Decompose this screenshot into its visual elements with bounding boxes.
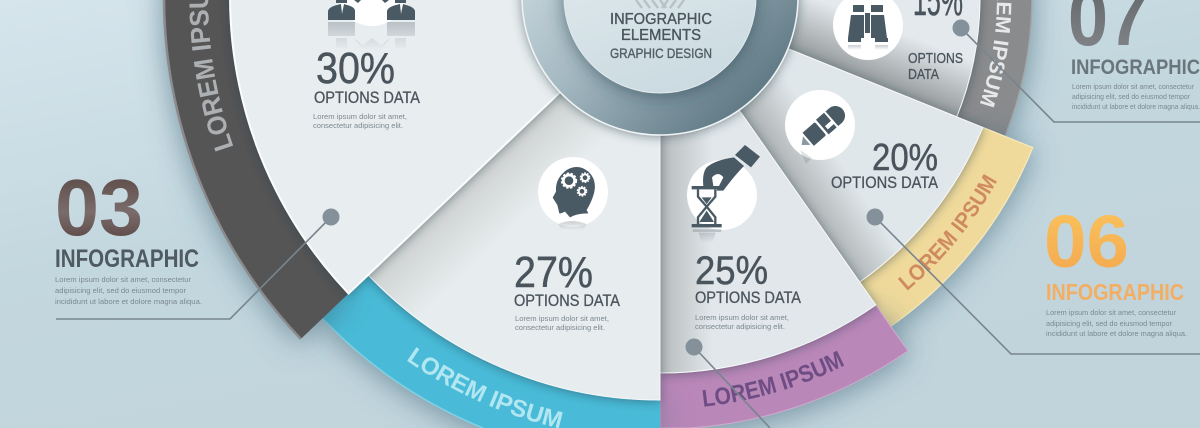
leader line (56, 208, 340, 319)
hatch icon (636, 0, 684, 8)
description text: incididunt ut labore et dolore magna aliqua. (55, 297, 202, 306)
description text: Lorem ipsum dolor sit amet, (515, 314, 609, 323)
description text: Lorem ipsum dolor sit amet, (313, 112, 407, 121)
segment: 25% options data (660, 108, 917, 428)
description text: consectetur adipisicing elit. (313, 121, 403, 130)
segment: 20% options data (740, 44, 1044, 340)
outer ring (522, 0, 798, 135)
options data label: OPTIONS (908, 51, 963, 67)
purple band: LOREM IPSUM (702, 350, 844, 407)
description text (515, 314, 609, 332)
description text: consectetur adipisicing elit. (515, 323, 605, 332)
inner disc (564, 0, 756, 93)
callout 05 leader (686, 338, 770, 428)
description text: adipisicing elit, sed do eiusmod tempor (55, 286, 186, 295)
icon: binoculars (833, 0, 903, 60)
central hub (522, 0, 798, 135)
callout 07 (952, 0, 1200, 122)
leader line (866, 208, 1200, 354)
description text: Lorem ipsum dolor sit amet, (695, 313, 789, 322)
icon: hand and hourglass (687, 145, 760, 243)
options data label: DATA (908, 67, 939, 83)
description text (313, 112, 407, 130)
description text (1072, 82, 1200, 111)
segment: 27% options data (316, 94, 677, 428)
hub title: GRAPHIC DESIGN (610, 45, 712, 61)
number 06: 06 (1044, 200, 1129, 283)
icon: pencil (785, 90, 855, 164)
segment: 15% options data (789, 0, 1054, 140)
hub title: INFOGRAPHIC (610, 11, 712, 28)
description text (1046, 308, 1187, 338)
segment: 30% options data (142, 0, 564, 352)
callout 03 (55, 163, 340, 319)
description text: consectetur adipisicing elit. (695, 322, 785, 331)
icon: head with gears (538, 157, 608, 230)
yellow band: LOREM IPSUM (898, 174, 997, 290)
description text: incididunt ut labore et dolore magna aliqua. (1046, 329, 1187, 338)
description text (55, 275, 202, 306)
grey band (958, 0, 1054, 140)
20% value: 20% (872, 137, 938, 179)
hub title (610, 11, 712, 61)
20% slice (660, 0, 983, 286)
27% slice (368, 0, 660, 400)
blue band (316, 276, 677, 428)
description text: Lorem ipsum dolor sit amet, consectetur (1046, 308, 1176, 317)
description text (695, 313, 789, 331)
hub title: ELEMENTS (621, 27, 701, 44)
15% slice (660, 0, 980, 117)
description text: Lorem ipsum dolor sit amet, consectetur (55, 275, 192, 284)
yellow band (860, 124, 1044, 340)
25% slice (660, 0, 876, 373)
description text: adipisicing elit, sed do eiusmod tempor (1046, 319, 1172, 328)
options data label: OPTIONS DATA (831, 173, 939, 192)
number 03: 03 (55, 163, 143, 252)
options data label (908, 51, 963, 83)
options data label: OPTIONS DATA (514, 291, 621, 310)
27% value: 27% (514, 248, 593, 297)
options data label: OPTIONS DATA (695, 288, 802, 307)
purple band (660, 294, 917, 428)
heading: INFOGRAPHIC (55, 245, 199, 273)
callout 06 (866, 200, 1200, 354)
description text: adipisicing elit, sed do eiusmod tempor (1072, 92, 1190, 101)
dark band (142, 0, 355, 352)
30% value: 30% (316, 44, 395, 93)
options data label: OPTIONS DATA (314, 88, 421, 107)
25% value: 25% (695, 249, 768, 293)
leader line (952, 20, 1200, 122)
icon: business people (328, 0, 415, 50)
30% slice (230, 0, 660, 294)
